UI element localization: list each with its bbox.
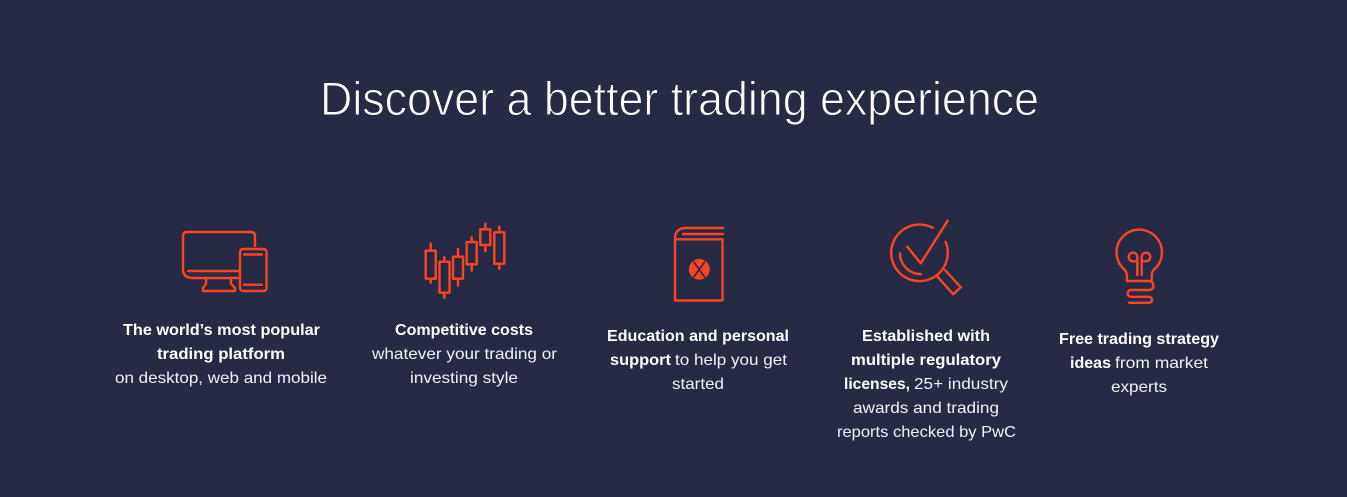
text: strategy ideas: [1059, 331, 1219, 396]
text: competitive costs: [371, 322, 558, 387]
text: education: support: [610, 352, 672, 369]
icon: magnifier with check mark: [891, 221, 961, 294]
text: competitive costs: investing style: [410, 370, 518, 387]
text: regulation: 25+ industry: [914, 376, 1008, 393]
text: competitive costs: Competitive costs: [395, 322, 533, 339]
text: regulation: reports checked by PwC: [837, 424, 1016, 441]
text: education: to help you get: [675, 352, 788, 369]
text: competitive costs: whatever your trading or: [371, 346, 558, 363]
text: trading platform: trading platform: [157, 346, 285, 363]
icon: book: [675, 228, 723, 300]
text: regulation: [837, 328, 1016, 441]
panel: regulation: [837, 221, 1016, 441]
text: strategy ideas: experts: [1111, 379, 1167, 396]
panel: strategy ideas: [1059, 230, 1219, 396]
text: trading platform: The world’s most popular: [123, 322, 320, 339]
text: trading platform: [115, 322, 327, 387]
icon: candlestick chart: [426, 224, 504, 298]
text: education: started: [672, 376, 724, 393]
text: strategy ideas: Free trading strategy: [1059, 331, 1219, 348]
text: education: [607, 328, 789, 393]
text: education: Education and personal: [607, 328, 789, 345]
panel: competitive costs: [371, 224, 558, 387]
icon: monitor and phone: [183, 232, 266, 291]
text: strategy ideas: ideas: [1070, 355, 1111, 372]
text: regulation: awards and trading: [853, 400, 999, 417]
icon: light bulb: [1117, 230, 1162, 303]
title: Discover a better trading experience: [320, 72, 1039, 125]
panel: education: [607, 228, 789, 393]
text: regulation: multiple regulatory: [851, 352, 1001, 369]
text: regulation: licenses,: [844, 376, 910, 393]
text: strategy ideas: from market: [1115, 355, 1209, 372]
panel: trading platform: [115, 232, 327, 387]
text: regulation: Established with: [862, 328, 990, 345]
text: trading platform: on desktop, web and mobile: [115, 370, 327, 387]
